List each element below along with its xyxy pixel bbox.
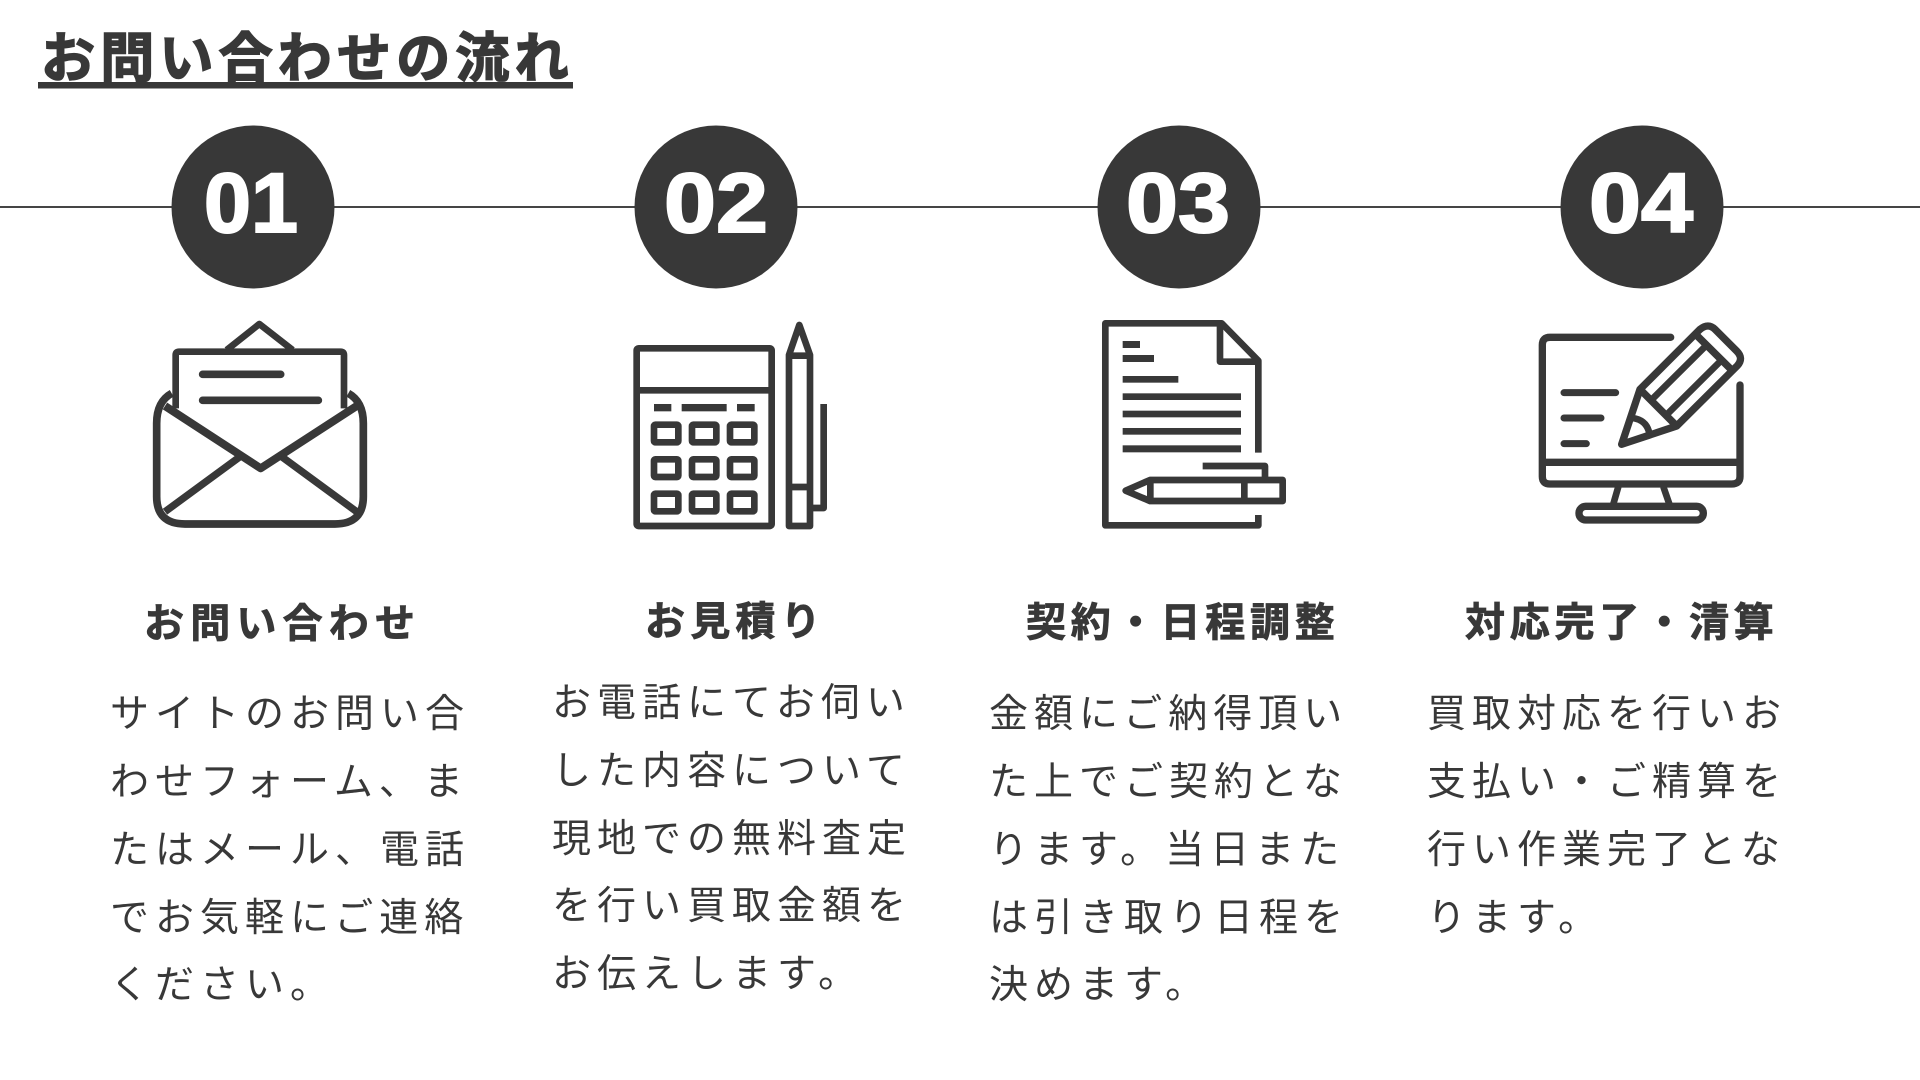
text block: step 2: した内容について bbox=[552, 750, 911, 793]
text block: step 4: 買取対応を行いお bbox=[1427, 693, 1787, 736]
text block: step 1: サイトのお問い合 bbox=[110, 693, 470, 736]
step badge 04: 04 bbox=[1589, 156, 1693, 250]
icon: calculator and pencil bbox=[637, 325, 824, 526]
text block: step 1 bbox=[110, 693, 470, 1007]
step badge 03 bbox=[1098, 126, 1260, 288]
text block: step 3: 決めます。 bbox=[989, 964, 1210, 1007]
step badge 01: 01 bbox=[204, 156, 298, 250]
text block: step 4: ります。 bbox=[1427, 897, 1603, 940]
text block: step 3 bbox=[989, 693, 1349, 1007]
timeline line bbox=[0, 206, 1920, 208]
heading: step 2: お見積り bbox=[645, 600, 826, 644]
step badge 02: 02 bbox=[664, 156, 768, 250]
text block: step 3: は引き取り日程を bbox=[989, 897, 1349, 940]
text block: step 4: 行い作業完了とな bbox=[1427, 829, 1786, 872]
step badge 03: 03 bbox=[1126, 156, 1230, 250]
text block: step 3: た上でご契約とな bbox=[989, 761, 1348, 804]
icon: contract document and pen bbox=[1105, 323, 1283, 525]
text block: step 1: でお気軽にご連絡 bbox=[110, 897, 469, 940]
text block: step 2: お電話にてお伺い bbox=[552, 682, 911, 725]
text block: step 1: ください。 bbox=[110, 964, 335, 1007]
text block: step 3: ります。当日また bbox=[989, 829, 1345, 872]
icon: computer monitor and pencil bbox=[1542, 326, 1741, 520]
text block: step 1: たはメール、電話 bbox=[110, 829, 470, 872]
text block: step 2 bbox=[552, 682, 912, 996]
step badge 04 bbox=[1560, 126, 1724, 288]
text block: step 4 bbox=[1427, 693, 1787, 940]
text block: step 4: 支払い・ご精算を bbox=[1427, 761, 1787, 804]
step badge 02 bbox=[634, 126, 798, 288]
icon: open envelope bbox=[157, 324, 363, 524]
text block: step 3: 金額にご納得頂い bbox=[989, 693, 1348, 736]
heading: step 3: 契約・日程調整 bbox=[1026, 601, 1340, 645]
text block: step 2: を行い買取金額を bbox=[552, 885, 912, 928]
step badge 01 bbox=[172, 126, 334, 288]
heading: step 1: お問い合わせ bbox=[144, 602, 421, 646]
heading: step 4: 対応完了・清算 bbox=[1465, 601, 1779, 645]
text block: step 1: わせフォーム、ま bbox=[110, 761, 469, 804]
title: お問い合わせの流れ bbox=[41, 29, 574, 89]
text block: step 2: お伝えします。 bbox=[552, 953, 863, 996]
text block: step 2: 現地での無料査定 bbox=[552, 818, 912, 861]
